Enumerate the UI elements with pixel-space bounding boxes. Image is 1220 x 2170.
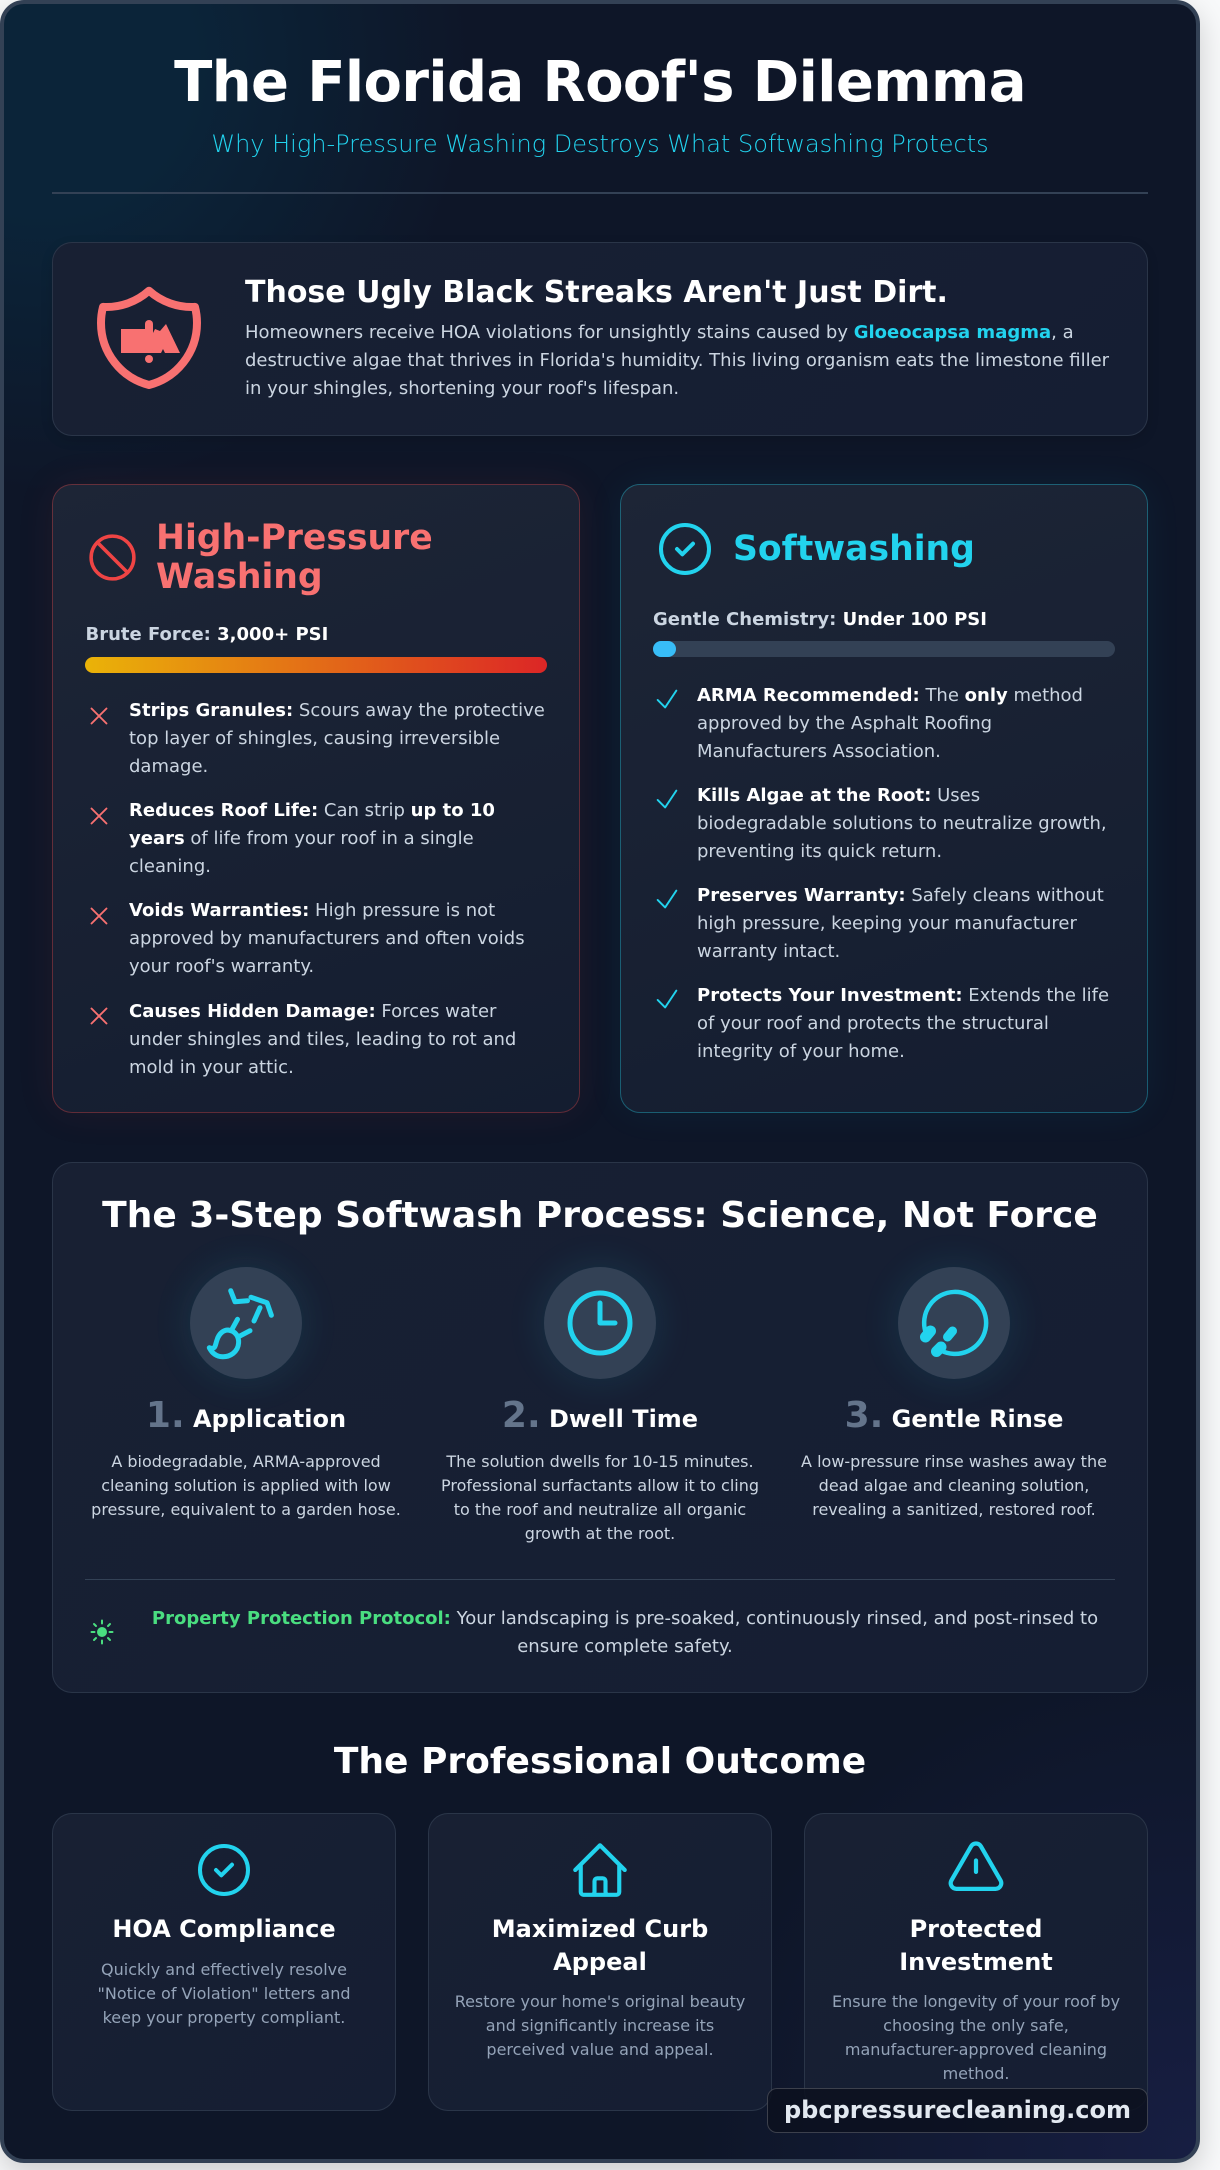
- card title: Appeal: [553, 1948, 647, 1976]
- icon: x: [90, 1008, 108, 1024]
- intro heading: Those Ugly Black Streaks Aren't Just Dirt.: [245, 275, 948, 310]
- card text: keep your property compliant.: [103, 2008, 345, 2026]
- step 1 icon: [190, 1267, 302, 1379]
- title: The Florida Roof's Dilemma: [174, 50, 1026, 115]
- icon: check: [656, 790, 678, 808]
- step 3 text: A low-pressure rinse washes away the: [801, 1452, 1107, 1471]
- panel: intro black streaks: [52, 242, 1148, 436]
- card title: [804, 1913, 1148, 1979]
- outcome heading: The Professional Outcome: [334, 1741, 866, 1782]
- icon: x: [90, 808, 108, 824]
- card text: manufacturer-approved cleaning: [845, 2040, 1107, 2058]
- card title: Protected: [910, 1915, 1042, 1943]
- panel: softwashing: [620, 484, 1148, 1113]
- item: voids warranties: [129, 900, 525, 977]
- icon: check: [656, 890, 678, 908]
- icon: check: [656, 690, 678, 708]
- property protection note: ensure complete safety.: [517, 1636, 733, 1657]
- item: strips granules: top layer of shingles, causing irreversible: [129, 728, 500, 749]
- card text: and significantly increase its: [486, 2016, 714, 2034]
- card text: Restore your home's original beauty: [455, 1992, 745, 2010]
- intro text: [245, 322, 1109, 399]
- step 2 text: Professional surfactants allow it to cling: [441, 1476, 759, 1495]
- item: arma recommended: ARMA Recommended: The only method: [697, 685, 1083, 706]
- step 3 text: dead algae and cleaning solution,: [819, 1476, 1089, 1495]
- card title: Investment: [899, 1948, 1053, 1976]
- item: kills algae: Kills Algae at the Root: Uses: [697, 785, 980, 806]
- icon: house: [573, 1843, 627, 1897]
- softwashing heading: Softwashing: [733, 528, 975, 568]
- high-pressure heading: [156, 518, 433, 597]
- step 1 text: pressure, equivalent to a garden hose.: [91, 1500, 401, 1519]
- card text: [97, 1960, 351, 2026]
- pressure bar: [653, 641, 1115, 657]
- item: hidden damage: Causes Hidden Damage: Forces water: [129, 1001, 496, 1022]
- item: preserves warranty: warranty intact.: [697, 941, 840, 962]
- card title: [492, 1915, 708, 1976]
- card text: [455, 1992, 745, 2058]
- header divider: [52, 192, 1148, 194]
- website badge: [767, 2088, 1148, 2133]
- item: reduces roof life: years of life from your roof in a single: [129, 828, 474, 849]
- high-pressure heading: High-Pressure: [156, 518, 433, 558]
- icon: check circle: [198, 1844, 250, 1896]
- item: hidden damage: mold in your attic.: [129, 1057, 294, 1078]
- step 1 text: cleaning solution is applied with low: [101, 1476, 391, 1495]
- icon: x: [90, 708, 108, 724]
- icon: rinse: [920, 1290, 988, 1357]
- high-pressure heading: Washing: [156, 557, 323, 597]
- icon: paint brush: [206, 1288, 274, 1360]
- icon: shield warning: [97, 286, 201, 389]
- card title: HOA Compliance: [112, 1915, 336, 1943]
- card: hoa compliance: [52, 1813, 396, 2111]
- icon: sun: [90, 1620, 114, 1644]
- icon: prohibited: [89, 534, 136, 581]
- item: hidden damage: under shingles and tiles, leading to rot and: [129, 1029, 516, 1050]
- icon: warning triangle: [948, 1841, 1004, 1891]
- item: kills algae: biodegradable solutions to neutralize growth,: [697, 813, 1107, 834]
- item: arma recommended: Manufacturers Association.: [697, 741, 941, 762]
- panel: high-pressure washing: [52, 484, 580, 1113]
- intro text: in your shingles, shortening your roof's lifespan.: [245, 378, 679, 399]
- step 3 heading: 3. Gentle Rinse: [845, 1395, 1063, 1436]
- item: strips granules: Strips Granules: Scours away the protective: [129, 700, 545, 721]
- process divider: [85, 1579, 1115, 1580]
- step 1 text: A biodegradable, ARMA-approved: [111, 1452, 381, 1471]
- card text: choosing the only safe,: [883, 2016, 1069, 2034]
- item: voids warranties: your roof's warranty.: [129, 956, 314, 977]
- pressure label: Gentle Chemistry: Under 100 PSI: [653, 609, 987, 630]
- step 3 text: [801, 1452, 1107, 1519]
- step 2 text: [441, 1452, 759, 1543]
- step 3 text: revealing a sanitized, restored roof.: [812, 1500, 1096, 1519]
- item: protects investment: Protects Your Investment: Extends the life: [697, 985, 1109, 1006]
- bar fill: [653, 641, 676, 657]
- item: strips granules: damage.: [129, 756, 208, 777]
- card text: Quickly and effectively resolve: [101, 1960, 347, 1978]
- step 2 icon: [544, 1267, 656, 1379]
- item: arma recommended: [697, 685, 1083, 762]
- item: hidden damage: [129, 1001, 516, 1078]
- item: voids warranties: approved by manufacturers and often voids: [129, 928, 525, 949]
- step 2 text: growth at the root.: [525, 1524, 675, 1543]
- card: protected investment: [804, 1813, 1148, 2111]
- icon: check: [656, 990, 678, 1008]
- item: voids warranties: Voids Warranties: High pressure is not: [129, 900, 495, 921]
- step 3 icon: [898, 1267, 1010, 1379]
- icon: clock: [568, 1290, 632, 1356]
- item: protects investment: integrity of your home.: [697, 1041, 905, 1062]
- item: arma recommended: approved by the Asphalt Roofing: [697, 713, 992, 734]
- card text: method.: [943, 2064, 1009, 2082]
- icon: x: [90, 908, 108, 924]
- property protection note: [152, 1608, 1098, 1657]
- subtitle: Why High-Pressure Washing Destroys What Softwashing Protects: [211, 130, 989, 158]
- card title: Maximized Curb: [492, 1915, 708, 1943]
- intro text: destructive algae that thrives in Florida's humidity. This living organism eats the limestone filler: [245, 350, 1109, 371]
- item: reduces roof life: cleaning.: [129, 856, 211, 877]
- step 1 heading: 1. Application: [146, 1395, 346, 1436]
- icon: check circle: [659, 523, 711, 575]
- pressure bar: [85, 657, 547, 673]
- step 1 text: [91, 1452, 401, 1519]
- card text: perceived value and appeal.: [486, 2040, 714, 2058]
- item: kills algae: preventing its quick return.: [697, 841, 942, 862]
- pressure label: Brute Force: 3,000+ PSI: [86, 624, 328, 645]
- item: strips granules: [129, 700, 545, 777]
- intro text: Homeowners receive HOA violations for unsightly stains caused by Gloeocapsa magma, a: [245, 322, 1074, 343]
- card text: "Notice of Violation" letters and: [97, 1984, 351, 2002]
- item: preserves warranty: high pressure, keeping your manufacturer: [697, 913, 1077, 934]
- card text: Ensure the longevity of your roof by: [832, 1992, 1120, 2010]
- process heading: The 3-Step Softwash Process: Science, Not Force: [102, 1195, 1098, 1236]
- item: protects investment: of your roof and protects the structural: [697, 1013, 1049, 1034]
- item: kills algae: [697, 785, 1107, 862]
- step 2 heading: 2. Dwell Time: [502, 1395, 698, 1436]
- property protection note: Property Protection Protocol: Your landscaping is pre-soaked, continuously rinsed, and post-rinsed to: [152, 1608, 1098, 1628]
- step 2 text: to the roof and neutralize all organic: [454, 1500, 746, 1519]
- item: preserves warranty: [697, 885, 1104, 962]
- panel: 3-step process: [52, 1162, 1148, 1693]
- card text: [804, 1990, 1148, 2086]
- item: preserves warranty: Preserves Warranty: Safely cleans without: [697, 885, 1104, 906]
- item: reduces roof life: [129, 800, 495, 877]
- item: protects investment: [697, 985, 1109, 1062]
- step 2 text: The solution dwells for 10-15 minutes.: [446, 1452, 754, 1471]
- card: curb appeal: [428, 1813, 772, 2111]
- item: reduces roof life: Reduces Roof Life: Can strip up to 10: [129, 800, 495, 821]
- website badge: pbcpressurecleaning.com: [784, 2096, 1131, 2124]
